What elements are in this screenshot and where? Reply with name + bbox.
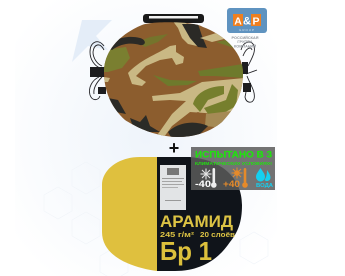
- spec line: [160, 230, 235, 239]
- logo letter A: [233, 14, 243, 26]
- protection class: Бр 1: [160, 236, 212, 266]
- icon: cold: -40: [195, 179, 211, 189]
- logo: A&P Group: [227, 8, 267, 48]
- logo: A&P Group: A: [234, 16, 242, 28]
- top strap: [143, 14, 204, 23]
- badge subheading: КЛИМАТИЧЕСКИХ УСЛОВИЯХ!: [195, 161, 272, 167]
- plus sign: +: [169, 138, 179, 158]
- product: camouflage cover: [89, 14, 257, 140]
- right side straps: [241, 42, 257, 102]
- logo: A&P Group: ГРУППА: [237, 40, 253, 44]
- icon: water: ВОДА: [256, 183, 273, 189]
- left side straps: [89, 42, 106, 100]
- badge: tested in 3 climate conditions: [191, 147, 275, 190]
- yellow half: [100, 155, 157, 273]
- badge heading: ИСПЫТАНО В 3: [195, 150, 272, 160]
- logo: A&P Group: GROUP: [239, 28, 255, 32]
- heading: aramid: АРАМИД: [160, 213, 233, 231]
- black half: [157, 155, 247, 273]
- spec line: 20 слоёв: [200, 230, 235, 239]
- spec line: 245 г/м²: [160, 230, 195, 239]
- icon: heat: +40: [223, 179, 240, 189]
- logo: A&P Group: P: [252, 16, 260, 28]
- camouflage body: [104, 22, 243, 137]
- logo: A&P Group: КОМПАНИЙ: [234, 44, 256, 48]
- logo: A&P Group: &: [243, 16, 251, 28]
- logo letter P: [251, 14, 261, 26]
- product: aramid armor panel: [100, 155, 247, 273]
- logo: A&P Group: РОССИЙСКАЯ: [232, 36, 259, 40]
- document label: [160, 165, 186, 210]
